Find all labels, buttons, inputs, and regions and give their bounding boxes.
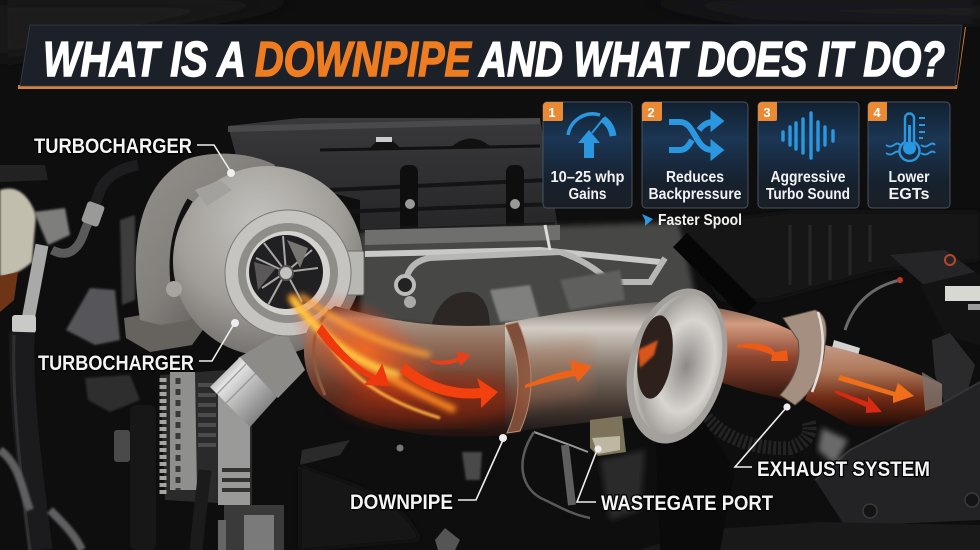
lower engine area [300,410,810,550]
middle pipe section [505,302,660,433]
outlet neck and cylinder [210,330,305,427]
alternator [160,368,284,550]
badge 1: 1 [548,105,556,120]
label: turbocharger lower [38,319,239,375]
bracket [344,251,364,295]
engine cover [228,118,560,250]
benefit card 4: lower EGTs: Lower [888,169,930,186]
title banner [18,25,966,89]
first pipe section [304,306,520,437]
benefit card 1: whp gains: Gains [568,186,607,203]
icon: crossing arrows [669,113,722,158]
hot exhaust flames [270,264,460,436]
label: downpipe: DOWNPIPE [350,491,453,514]
wastegate fitting [590,416,626,456]
banner plate [20,25,962,86]
benefit card 3: turbo sound: Aggressive [770,169,846,186]
label: wastegate port [577,445,773,515]
right engine bay [640,212,980,550]
label: downpipe [350,434,507,514]
flared outlet [611,278,743,454]
benefit card 2: backpressure: Backpressure [648,186,742,203]
title text: DOWNPIPE [255,33,472,87]
label: wastegate port: WASTEGATE PORT [601,492,773,515]
icon: gauge with arrow [568,114,613,158]
rear scroll housing [136,154,275,325]
badge 4: 4 [873,105,881,120]
label: turbocharger lower: TURBOCHARGER [38,352,194,375]
V-band flange [780,310,826,405]
icon: sound wave [783,113,833,158]
downpipe [304,278,942,456]
label: turbocharger top: TURBOCHARGER [34,135,192,158]
icon: thermometer over waves [886,114,935,161]
third pipe section [805,345,942,427]
turbine blades [256,236,318,305]
benefit card 2: backpressure: Reduces [666,169,724,186]
label: exhaust system: EXHAUST SYSTEM [757,458,930,481]
label: turbocharger top [34,135,235,177]
mounting flange [124,310,210,352]
faster spool note: Faster Spool [658,212,742,229]
turbocharger [124,154,364,427]
label: exhaust system [735,403,930,481]
second pipe section [700,305,805,400]
title text: WHAT IS A [43,33,246,87]
benefit card 3: turbo sound: Turbo Sound [766,186,850,203]
benefit card 3: turbo sound [758,102,859,208]
badge 2: 2 [647,105,655,120]
inner ring [225,210,351,336]
banner shadow [18,27,966,89]
compressor housing [173,166,363,356]
left bay parts [0,165,156,550]
title text [43,33,945,87]
flow arrows [318,326,914,413]
benefit card 1: whp gains: 10–25 whp [550,169,625,186]
benefit card 4: lower EGTs: EGTs [888,186,930,203]
benefit card 4: lower EGTs [868,102,950,208]
engine block [360,222,700,340]
benefit card 2: backpressure [642,102,748,208]
badge 3: 3 [763,105,771,120]
benefit card 1: whp gains [543,102,632,208]
